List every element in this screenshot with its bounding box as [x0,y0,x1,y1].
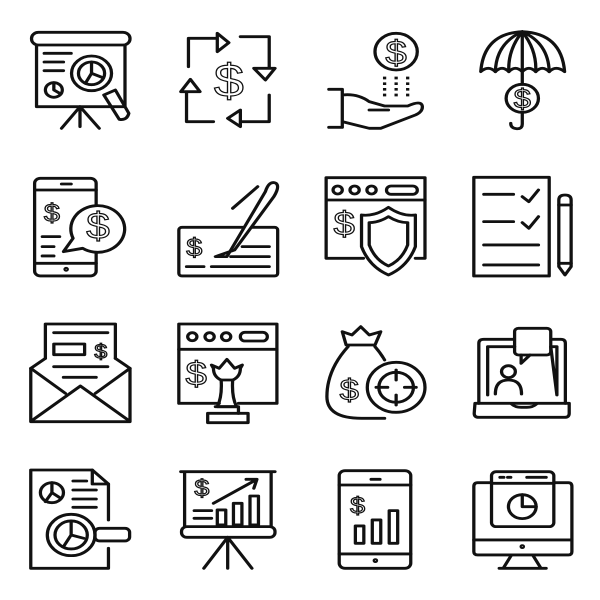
icon: growth chart board [181,472,275,568]
icon: cheque with pen [179,183,278,276]
icon: hand receiving coin [329,33,422,128]
icon: checklist with pencil [474,177,571,276]
icon: envelope with invoice [31,324,130,422]
icon: report analysis [31,470,130,568]
icon: presentation board with magnifier [32,32,130,128]
icon: growth chart board: $ [194,476,209,502]
icon: mobile money chat: $ [86,206,110,247]
icon: money bag target [327,327,425,418]
icon: mobile money chat [35,178,125,276]
icon: laptop video call [474,328,569,417]
icon: cheque with pen: $ [186,234,202,262]
icon: hand receiving coin: $ [385,33,407,71]
icon: tablet bar chart [339,471,411,568]
icon: money bag target: $ [340,373,359,406]
icon: money cycle arrows [181,33,275,127]
icon: envelope with invoice: $ [94,340,107,363]
icon: secure browser shield [326,178,425,275]
icon: money cycle arrows: $ [214,54,244,107]
icon: monitor pie chart [474,472,572,568]
icon: tablet bar chart: $ [350,493,365,519]
icon: umbrella protecting money [481,32,565,129]
icon: strategy browser chess: $ [185,354,207,392]
icon: secure browser shield: $ [334,204,355,242]
icon: umbrella protecting money: $ [514,85,531,114]
icon: strategy browser chess [179,324,277,423]
icon: mobile money chat: $ [44,199,60,227]
